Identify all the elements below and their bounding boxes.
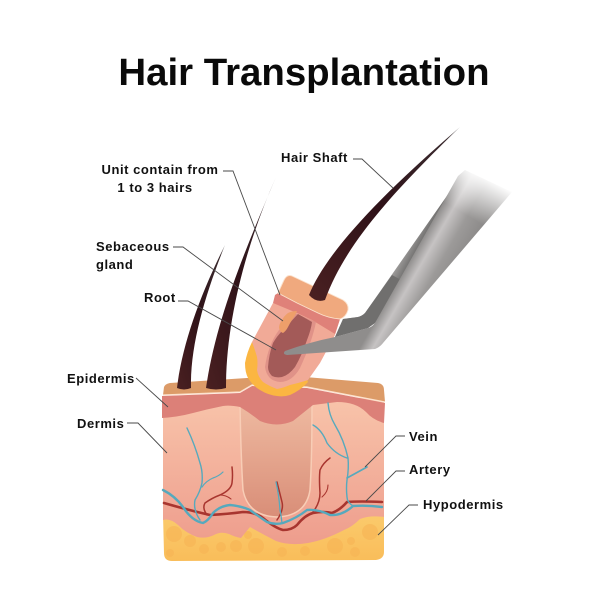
label: vein <box>365 429 438 467</box>
surface highlight <box>163 385 385 402</box>
veins <box>163 403 382 524</box>
label: vein: Vein <box>409 429 438 444</box>
left hair <box>177 245 225 390</box>
epidermis layer <box>162 386 385 424</box>
label: root <box>144 290 276 350</box>
label: root: Root <box>144 290 176 305</box>
tan skin surface <box>163 377 385 402</box>
label: dermis <box>77 416 167 453</box>
follicle hole <box>240 405 312 517</box>
label: artery: Artery <box>409 462 451 477</box>
label: hypodermis: Hypodermis <box>423 497 504 512</box>
plug body <box>252 303 340 389</box>
label: hair shaft <box>281 150 393 188</box>
skin cross-section <box>162 377 385 561</box>
label: unit contain from 1 to 3 hairs: Unit contain from <box>102 162 218 177</box>
cut band <box>273 293 340 334</box>
root cavity <box>268 314 312 377</box>
title: Hair Transplantation <box>118 51 490 94</box>
label: artery <box>366 462 451 501</box>
hypodermis fat layer <box>163 512 384 561</box>
hair graft unit <box>245 127 460 396</box>
fat cap <box>245 340 308 396</box>
middle hair <box>206 177 276 390</box>
label: sebaceous gland: gland <box>96 257 133 272</box>
top hair shaft <box>309 127 460 301</box>
plug top face <box>278 276 348 319</box>
dermis layer <box>163 398 384 544</box>
label: dermis: Dermis <box>77 416 124 431</box>
main arm and lower jaw <box>284 170 512 355</box>
root sheath <box>265 313 316 382</box>
sebaceous gland <box>279 311 297 333</box>
label: hair shaft: Hair Shaft <box>281 150 348 165</box>
tweezers <box>284 158 528 355</box>
arteries <box>164 458 382 530</box>
label: epidermis <box>67 371 168 407</box>
label: epidermis: Epidermis <box>67 371 135 386</box>
label: unit contain from 1 to 3 hairs <box>102 162 280 295</box>
upper jaw shadow <box>335 275 403 337</box>
label: unit contain from 1 to 3 hairs: 1 to 3 hairs <box>117 180 193 195</box>
upper jaw and ridge <box>335 170 468 337</box>
label: sebaceous gland: Sebaceous <box>96 239 170 254</box>
label: sebaceous gland <box>96 239 283 321</box>
label: hypodermis <box>378 497 504 535</box>
